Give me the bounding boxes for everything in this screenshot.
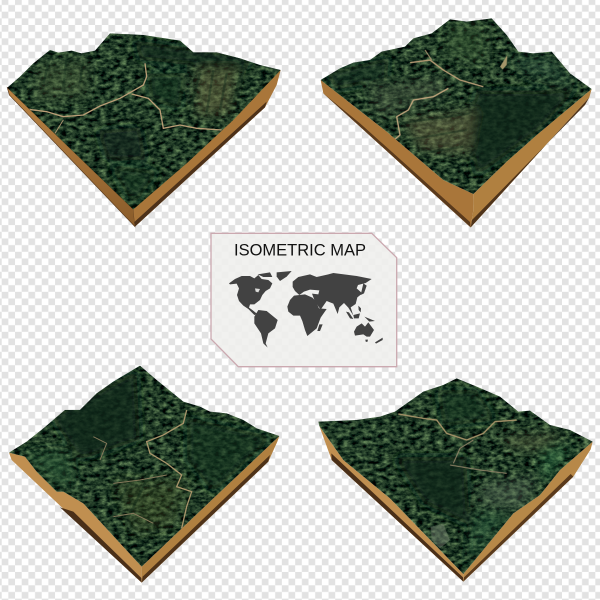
australia xyxy=(354,322,374,337)
terrain surface xyxy=(0,360,287,573)
terrain block: bottom right xyxy=(310,370,597,583)
ridge lines xyxy=(43,57,240,113)
south america xyxy=(254,310,278,348)
title: ISOMETRIC MAP xyxy=(234,241,366,260)
africa xyxy=(287,294,327,336)
british isles xyxy=(293,282,296,288)
terrain block: bottom left xyxy=(0,360,287,583)
great lakes xyxy=(255,288,260,292)
soil wall: left xyxy=(321,80,473,227)
terrain block: top right xyxy=(310,10,597,227)
grey rock patch xyxy=(431,524,450,548)
new zealand xyxy=(375,338,383,344)
terrain surface xyxy=(318,378,592,575)
map card xyxy=(211,233,397,367)
card panel xyxy=(211,233,397,367)
river xyxy=(147,410,192,528)
north america xyxy=(229,275,272,315)
soil wall: right xyxy=(471,89,592,227)
eurasia xyxy=(293,273,372,316)
asia islands xyxy=(361,283,367,295)
madagascar xyxy=(317,324,323,331)
soil wall: right xyxy=(142,436,279,583)
ridge lines xyxy=(377,73,470,153)
soil wall: left xyxy=(319,426,463,582)
terrain surface xyxy=(0,27,287,213)
soil wall: right xyxy=(463,442,593,582)
soil wall: left xyxy=(9,453,142,583)
world map xyxy=(229,271,383,348)
ridge lines xyxy=(97,450,150,520)
terrain surface xyxy=(310,10,597,210)
soil wall: left xyxy=(7,88,135,227)
arctic islands xyxy=(258,272,272,277)
river xyxy=(398,414,517,440)
terrain block: top left xyxy=(0,27,287,227)
river xyxy=(410,60,483,87)
river xyxy=(28,63,147,117)
soil wall: right xyxy=(133,70,281,227)
greenland xyxy=(277,271,292,281)
